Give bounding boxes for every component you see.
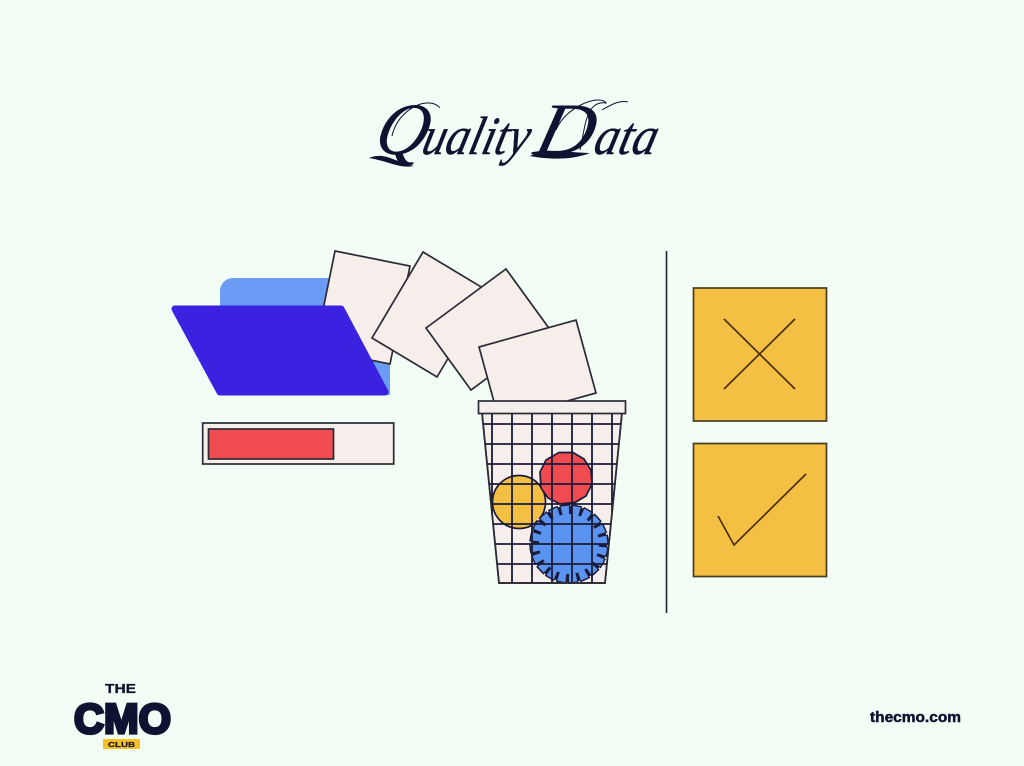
title xyxy=(368,89,670,171)
title: D xyxy=(527,89,606,171)
title: ata xyxy=(589,106,666,166)
website url: thecmo.com xyxy=(870,709,961,726)
logo: The CMO Club xyxy=(74,681,171,749)
bin outline xyxy=(482,413,622,583)
logo word: the: THE xyxy=(105,681,136,696)
progress bar xyxy=(203,423,394,464)
blue gear ball xyxy=(530,504,608,584)
paper 2 xyxy=(372,252,488,377)
folder front xyxy=(175,309,385,392)
illustration: folder with papers xyxy=(175,251,596,420)
bin body xyxy=(482,413,622,583)
cross box xyxy=(694,288,826,421)
folder back xyxy=(220,278,390,395)
paper 4 xyxy=(478,319,597,400)
title: uality xyxy=(417,106,539,166)
title: Q xyxy=(368,89,440,171)
progress bar fill xyxy=(208,429,334,459)
bin rim xyxy=(478,401,626,414)
bin mesh xyxy=(480,413,625,583)
red ball xyxy=(540,452,592,504)
icon: cross xyxy=(724,319,795,389)
paper 1 xyxy=(315,251,410,364)
trash bin xyxy=(478,401,626,584)
icon: check mark xyxy=(718,474,806,545)
logo word: cmo: CMO xyxy=(74,695,171,742)
paper 3 xyxy=(426,269,551,390)
yellow ball xyxy=(492,476,546,528)
logo badge: club: CLUB xyxy=(108,740,136,749)
check box xyxy=(694,444,826,576)
divider line xyxy=(666,251,668,613)
